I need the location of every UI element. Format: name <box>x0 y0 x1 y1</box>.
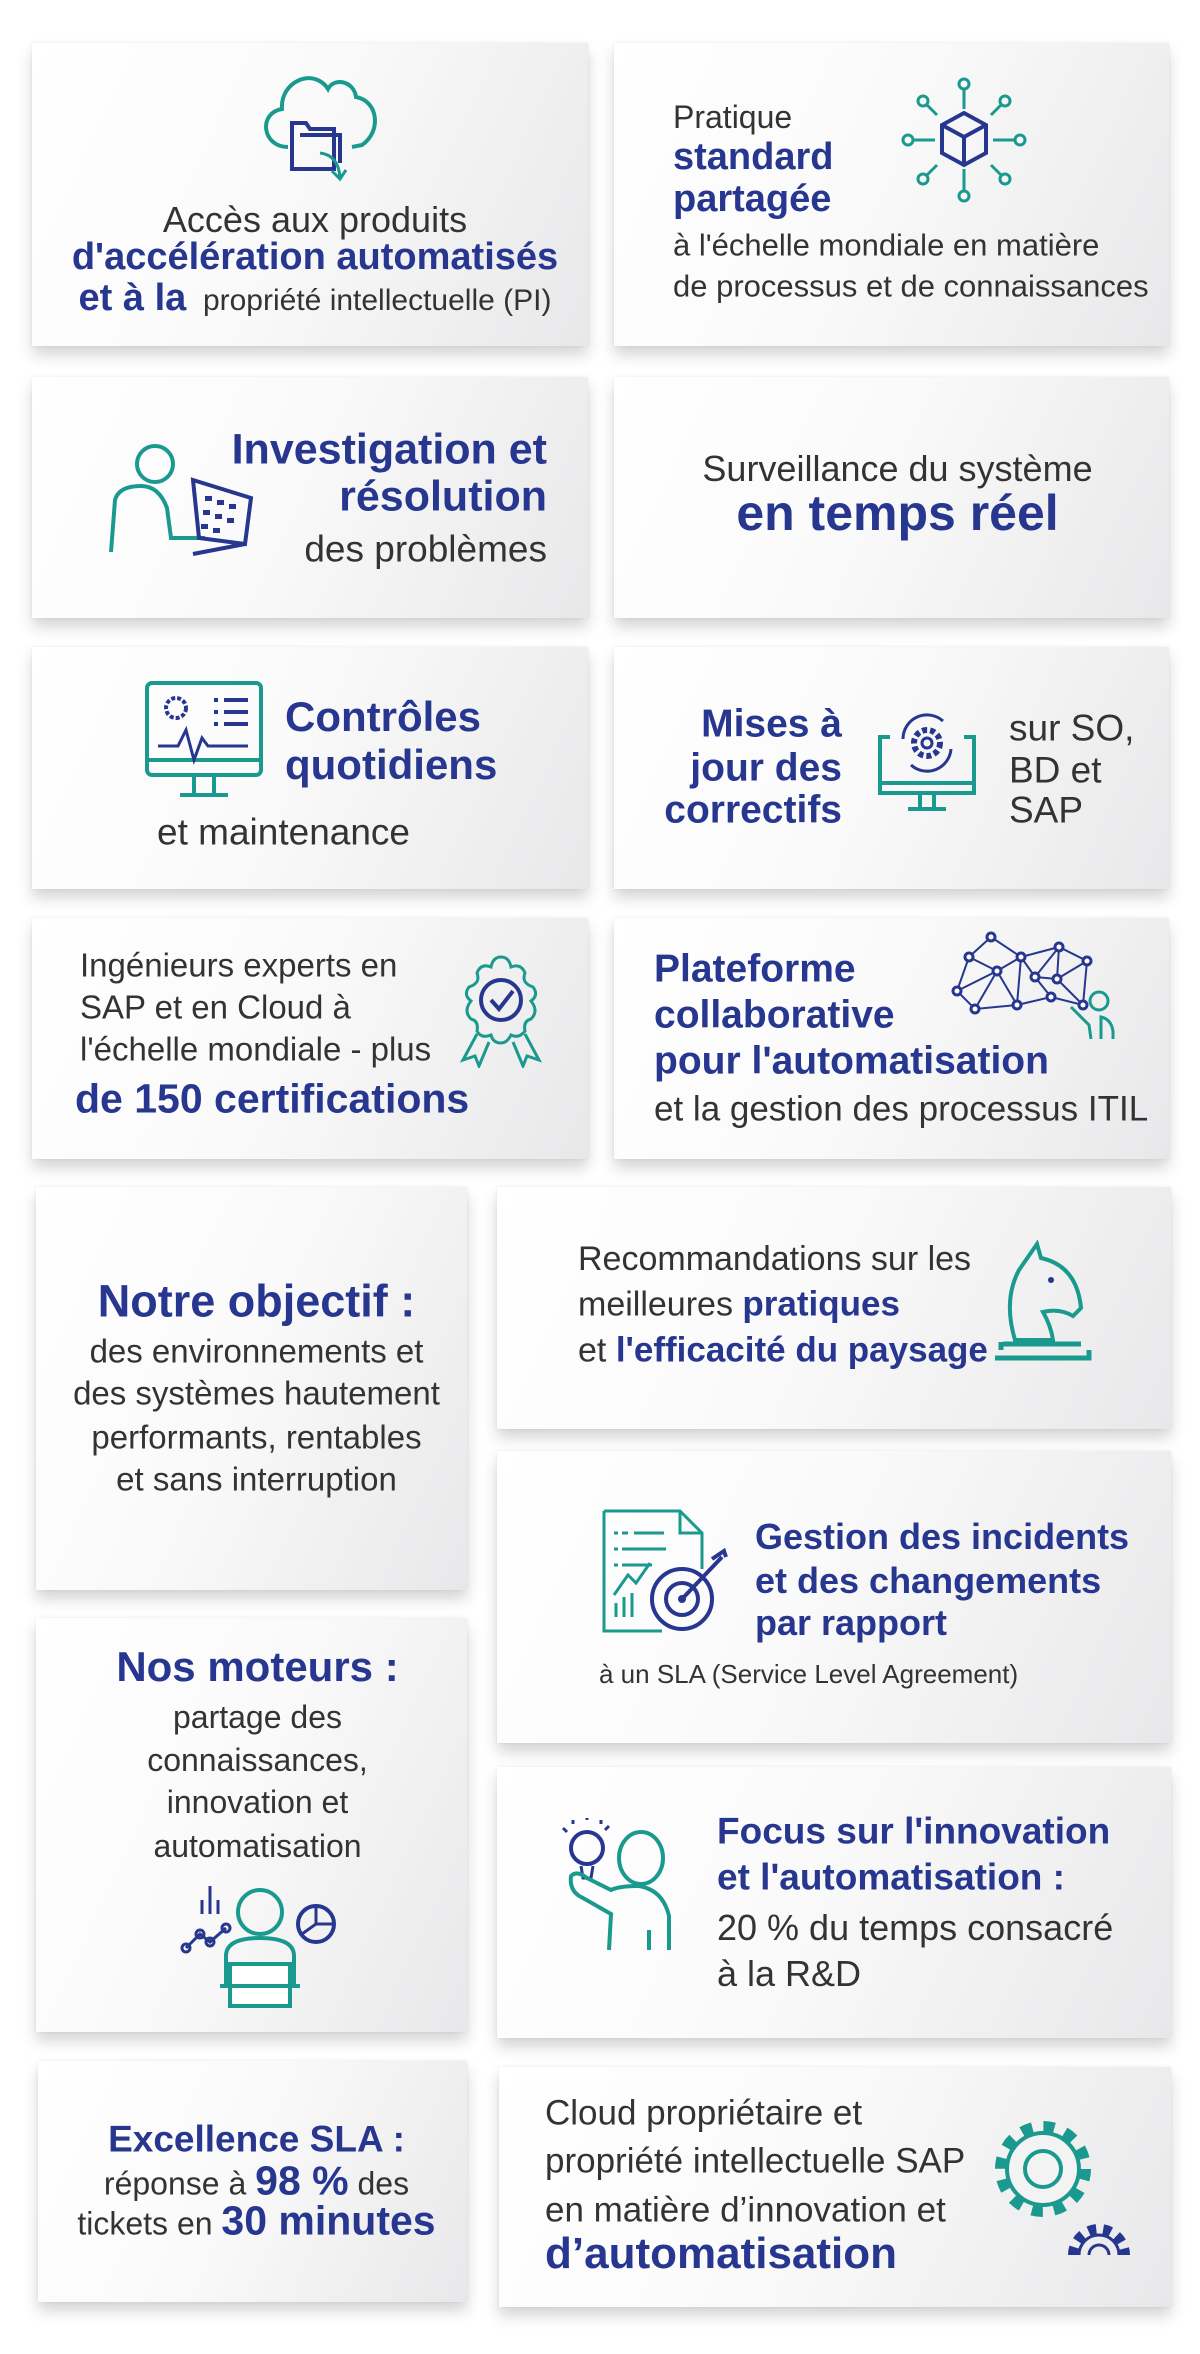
panel: cloud proprietaire <box>499 2067 1171 2307</box>
text: des problèmes <box>304 528 547 570</box>
text <box>702 448 1093 541</box>
text right: BD et <box>1009 750 1102 790</box>
text: Cloud propriétaire et <box>545 2094 862 2132</box>
icon: doc target <box>602 1510 728 1632</box>
text: Plateforme <box>654 948 856 990</box>
text: Recommandations sur les <box>578 1240 971 1278</box>
text: partage des <box>173 1699 342 1735</box>
text: réponse à 98 % des <box>104 2158 409 2204</box>
text: et sans interruption <box>116 1460 397 1498</box>
panel: nos moteurs <box>36 1618 467 2032</box>
panel: plateforme <box>614 918 1169 1159</box>
panel: controles <box>32 647 588 889</box>
icon: network person <box>952 932 1114 1039</box>
text <box>73 1276 440 1498</box>
text: de processus et de connaissances <box>673 268 1149 304</box>
icon: chess knight <box>995 1240 1092 1360</box>
text <box>755 1516 1129 1643</box>
icon: person laptop charts <box>180 1886 336 2008</box>
text: automatisation <box>153 1828 362 1864</box>
text: d’automatisation <box>545 2229 897 2278</box>
text: innovation et <box>167 1784 348 1820</box>
text: sla: à un SLA (Service Level Agreement) <box>599 1659 1018 1689</box>
text right: SAP <box>1009 790 1083 830</box>
text: et la gestion des processus ITIL <box>654 1090 1148 1128</box>
text <box>717 1810 1113 1994</box>
text <box>673 99 1149 304</box>
text: résolution <box>339 472 547 520</box>
panel: recommandations <box>497 1187 1171 1429</box>
text: 20 % du temps consacré <box>717 1907 1113 1948</box>
text <box>285 693 497 788</box>
icon: badge <box>460 956 542 1068</box>
text: Mises à <box>701 702 842 746</box>
text <box>116 1643 399 1864</box>
panel: investigation <box>32 377 588 618</box>
text: meilleures pratiques <box>578 1284 900 1324</box>
text: Notre objectif : <box>98 1276 415 1326</box>
panel: pratique standard <box>614 43 1169 346</box>
text: connaissances, <box>147 1742 368 1778</box>
text: tickets en 30 minutes <box>77 2198 436 2244</box>
text <box>72 199 558 319</box>
icon: person bulb <box>562 1818 671 1950</box>
text: maintenance: et maintenance <box>157 812 410 852</box>
icon: monitor gear <box>878 713 976 811</box>
text: propriété intellectuelle SAP <box>545 2142 965 2180</box>
text: collaborative <box>654 994 895 1036</box>
text: de 150 certifications <box>75 1076 469 1122</box>
panel: notre objectif <box>36 1187 467 1590</box>
text: pour l'automatisation <box>654 1040 1049 1082</box>
text: Contrôles <box>285 693 481 740</box>
text: Gestion des incidents <box>755 1516 1129 1557</box>
panel: ingenieurs <box>32 918 588 1159</box>
text <box>77 2118 436 2244</box>
text: Ingénieurs experts en <box>80 946 397 984</box>
text <box>545 2094 965 2278</box>
panel: gestion incidents <box>497 1451 1171 1743</box>
text <box>578 1240 988 1370</box>
text: des environnements et <box>90 1332 423 1370</box>
text: d'accélération automatisés <box>72 236 558 278</box>
icon: network cube <box>902 78 1026 202</box>
text: correctifs <box>664 788 842 832</box>
text <box>654 948 1148 1128</box>
text right: sur SO, <box>1009 708 1134 748</box>
text: Accès aux produits <box>163 199 467 240</box>
text: jour des <box>690 746 842 790</box>
text: et l'automatisation : <box>717 1856 1065 1898</box>
text: Nos moteurs : <box>116 1643 399 1690</box>
text: l'échelle mondiale - plus <box>80 1030 431 1068</box>
panel: surveillance <box>614 377 1169 618</box>
text: partagée <box>673 178 831 220</box>
text: en temps réel <box>736 485 1059 541</box>
text: à la R&D <box>717 1953 861 1994</box>
icon: gears <box>995 2121 1130 2255</box>
text <box>75 946 469 1122</box>
text: Pratique <box>673 99 792 135</box>
text: Excellence SLA : <box>108 2118 405 2160</box>
text: standard <box>673 136 833 178</box>
panel: acces produits <box>32 43 588 346</box>
text: à l'échelle mondiale en matière <box>673 228 1099 262</box>
icon: monitor <box>145 681 263 797</box>
text: et à la propriété intellectuelle (PI) <box>79 277 551 319</box>
text: en matière d’innovation et <box>545 2190 946 2230</box>
text: par rapport <box>755 1602 947 1643</box>
panel: mises a jour <box>614 647 1169 889</box>
icon: person laptop <box>109 444 254 556</box>
text: et des changements <box>755 1560 1101 1601</box>
text: des systèmes hautement <box>73 1374 440 1412</box>
text: et l'efficacité du paysage <box>578 1330 988 1370</box>
panel: excellence SLA <box>38 2061 467 2302</box>
text: Investigation et <box>232 426 547 474</box>
icon: cloud folder <box>264 76 377 182</box>
panel: focus innovation <box>497 1767 1171 2038</box>
text: SAP et en Cloud à <box>80 988 351 1026</box>
text right <box>1009 708 1134 830</box>
text: Surveillance du système <box>702 448 1093 489</box>
text <box>664 702 842 832</box>
text <box>232 426 547 570</box>
text: quotidiens <box>285 741 497 788</box>
text: performants, rentables <box>91 1418 422 1456</box>
text: Focus sur l'innovation <box>717 1810 1110 1852</box>
